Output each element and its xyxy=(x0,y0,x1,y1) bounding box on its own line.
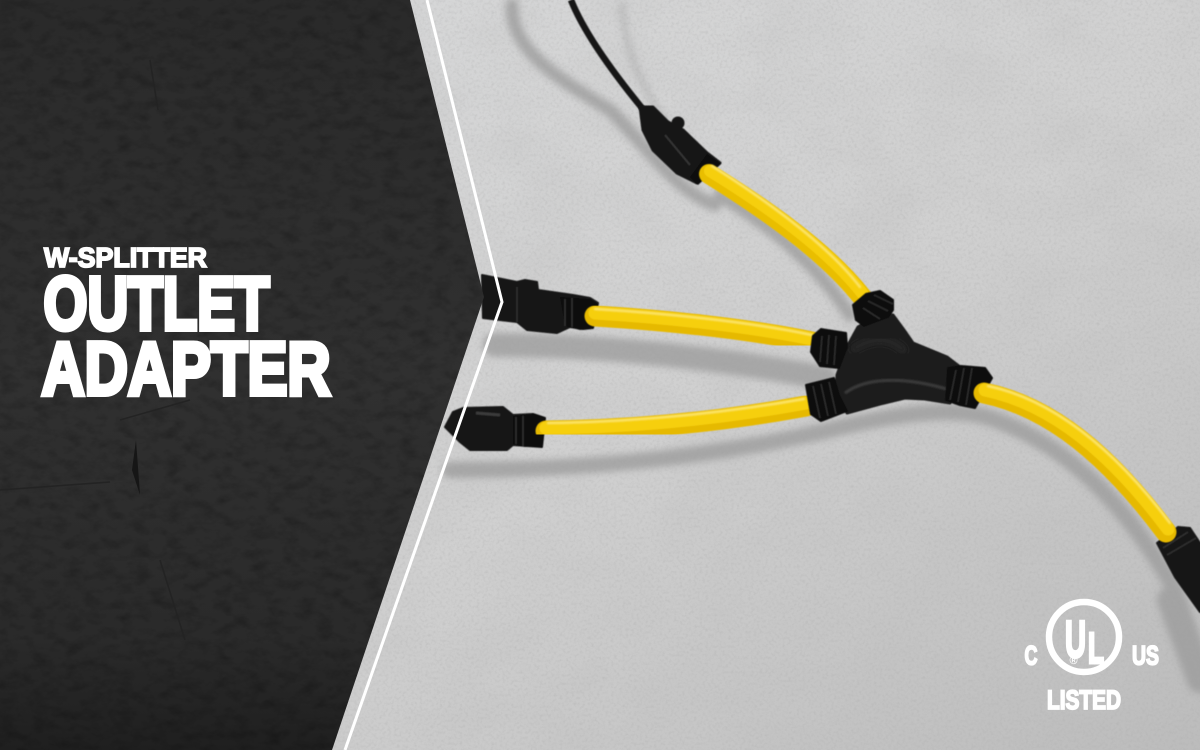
middle black plug xyxy=(482,275,598,333)
hub collar: top xyxy=(853,291,893,326)
letters US: US xyxy=(1132,640,1159,670)
hub collar: lower left xyxy=(806,378,847,421)
letter U: U xyxy=(1065,611,1086,669)
title line: W-SPLITTER: W-SPLITTER xyxy=(44,242,207,273)
UL ring xyxy=(1049,602,1119,672)
hub collar: left xyxy=(811,329,847,368)
yellow cable: lower branch xyxy=(546,399,806,431)
title xyxy=(42,242,330,410)
lower black plug xyxy=(445,407,545,450)
black Y hub splitter xyxy=(806,291,992,421)
LISTED label: LISTED xyxy=(1047,685,1121,715)
title line: OUTLET: OUTLET xyxy=(44,262,270,346)
UL listed certification mark xyxy=(1024,602,1159,715)
yellow cable: middle branch xyxy=(595,309,812,342)
letter L: L xyxy=(1088,624,1104,673)
title line: ADAPTER: ADAPTER xyxy=(42,326,330,410)
registered mark: ® xyxy=(1070,655,1078,667)
top black power cord xyxy=(571,0,642,108)
dark angular title panel xyxy=(0,0,500,750)
top black plug xyxy=(640,107,721,185)
cable shadows on floor xyxy=(450,5,1200,680)
letter C: C xyxy=(1024,640,1038,670)
white chevron outline xyxy=(345,0,502,750)
yellow cable: top branch xyxy=(709,166,862,297)
right black connector xyxy=(1157,527,1200,612)
yellow cable: main trunk xyxy=(984,386,1170,532)
hub collar: right xyxy=(946,366,992,408)
